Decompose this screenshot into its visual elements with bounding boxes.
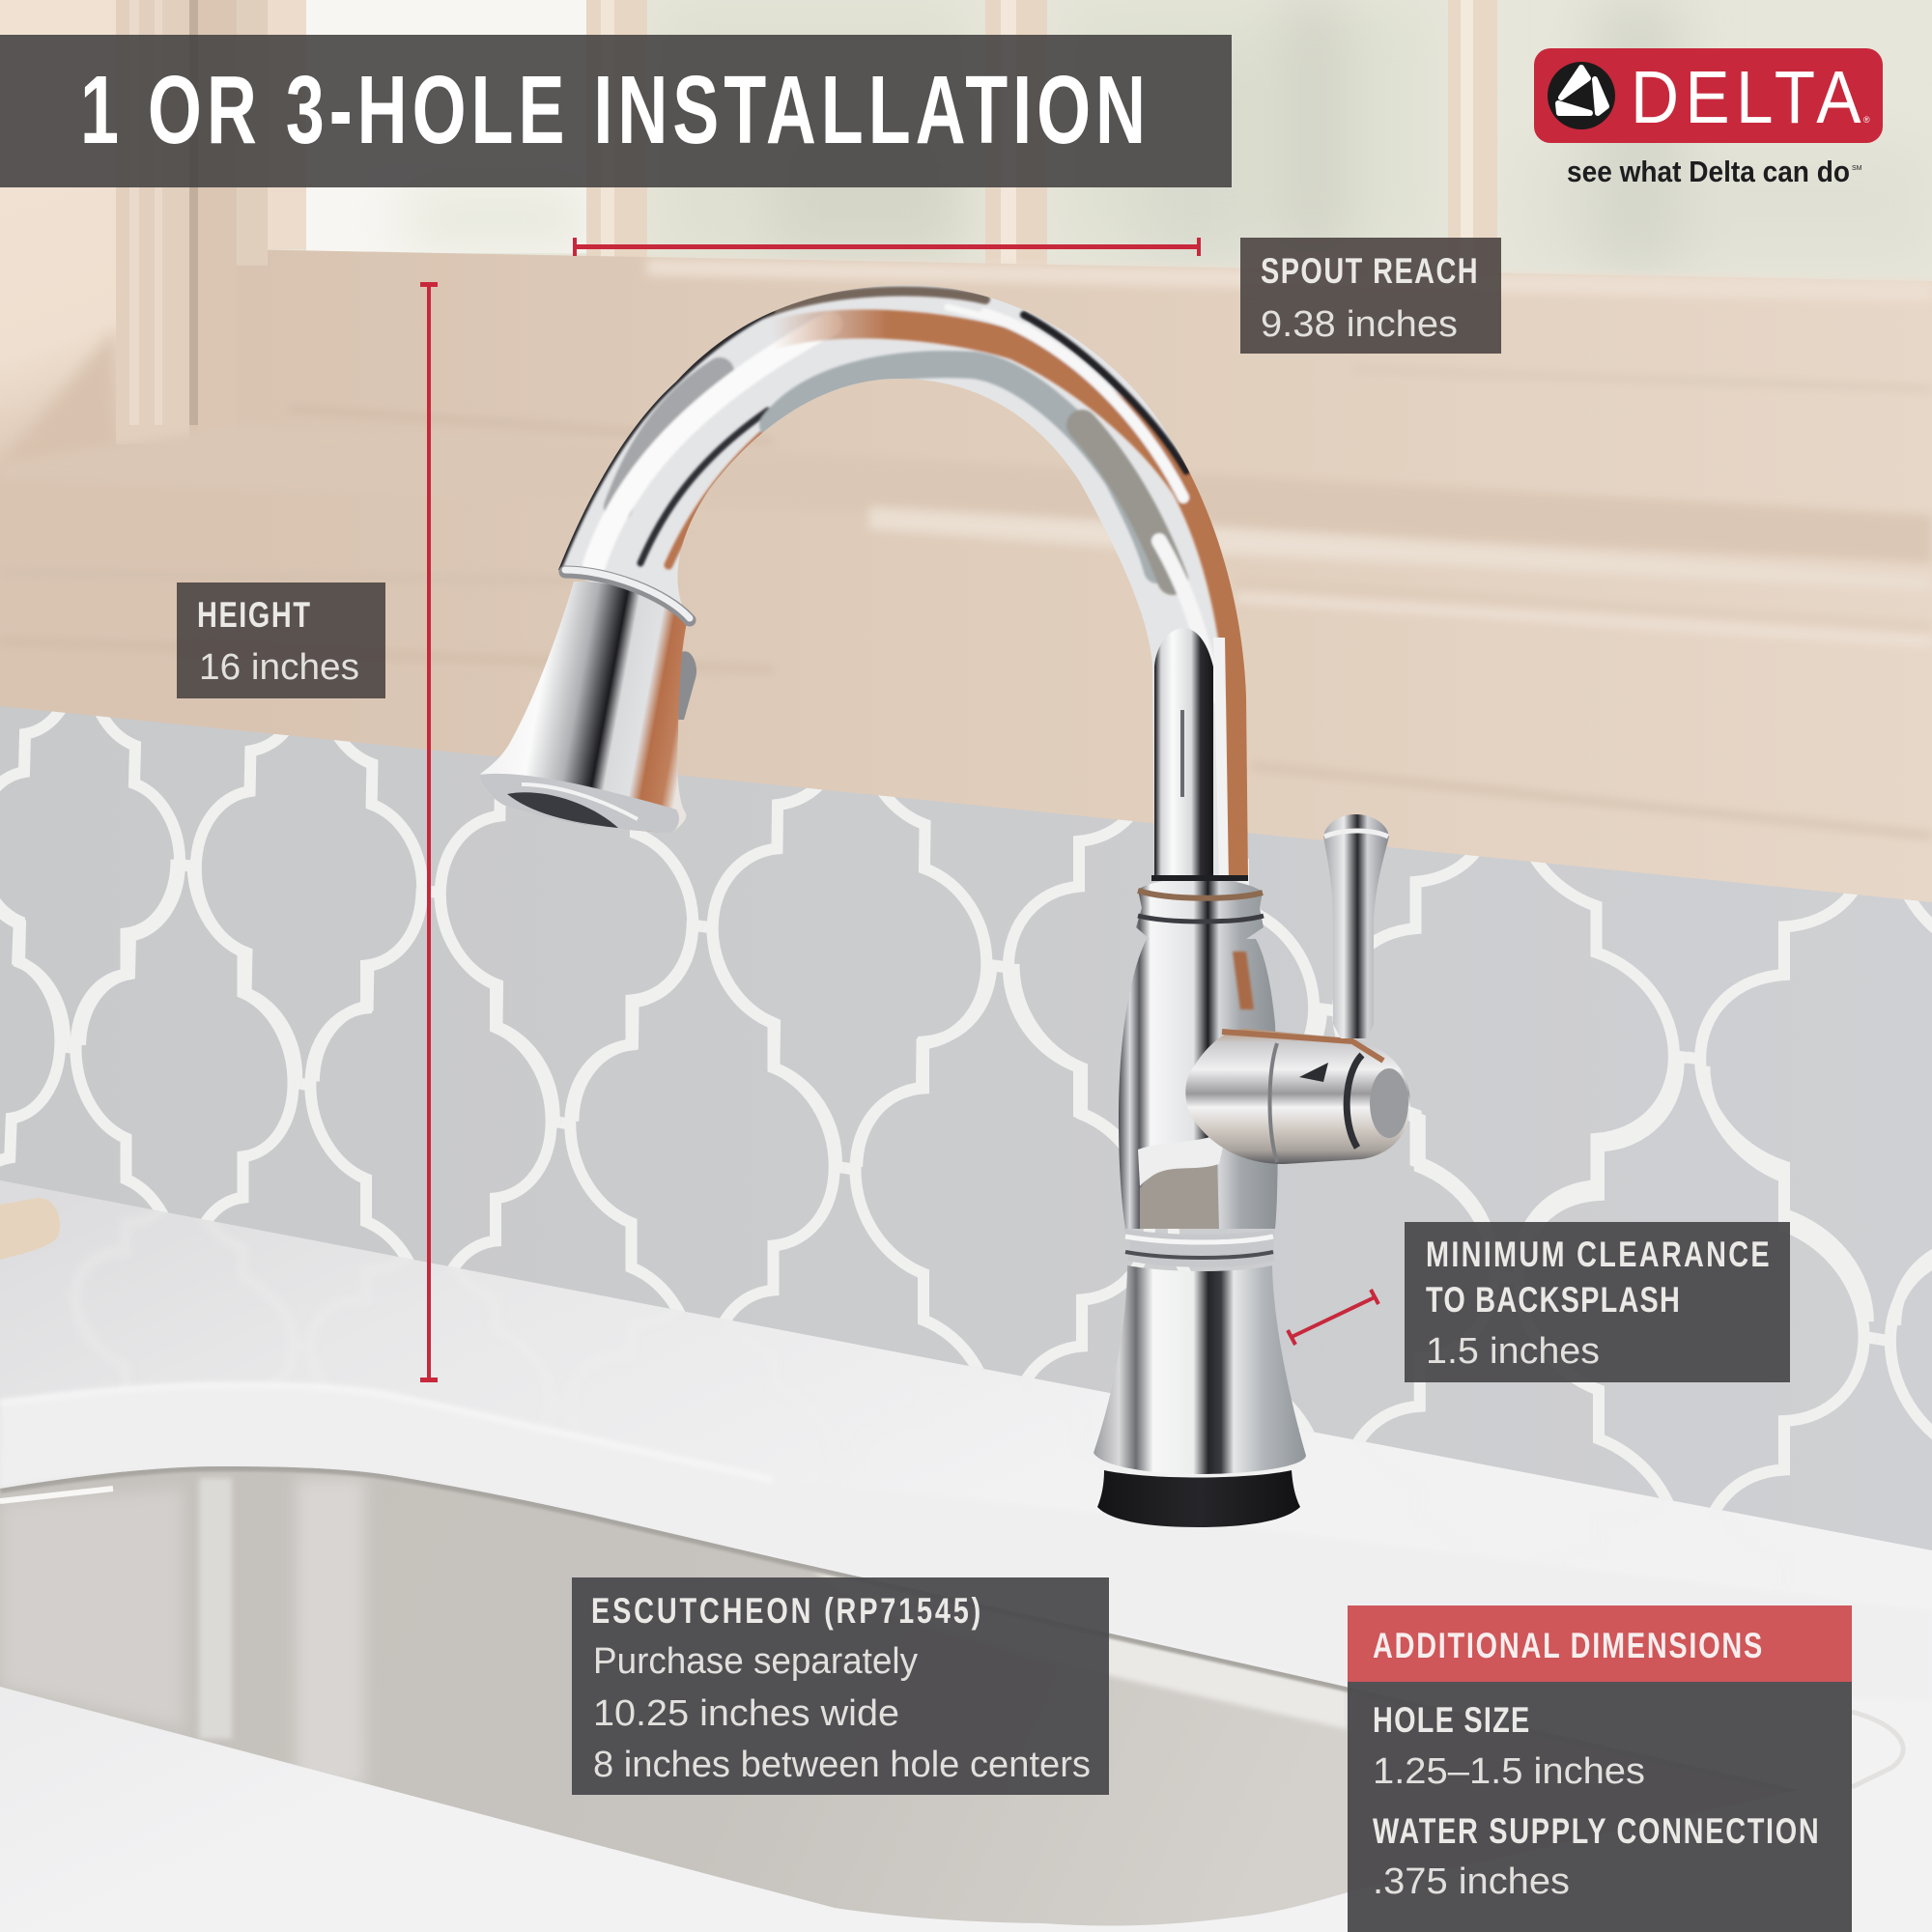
panel header [1348,1605,1852,1682]
Delta logo [1534,48,1883,188]
collar ring on head [565,570,690,620]
riser [1154,628,1213,884]
wordmark: DELTA [1631,56,1861,139]
callout: spout reach: 9.38 inches [1261,304,1458,345]
callout: escutcheon: ESCUTCHEON (RP71545) [591,1592,980,1632]
handle body [1185,1029,1410,1164]
background: window with blurred garden view [0,0,1932,290]
callout: height: HEIGHT [197,596,310,636]
wooden board at left [0,1198,60,1260]
sink far rim corner [1852,1712,1903,1787]
callout: minimum clearance: 1.5 inches [1426,1331,1600,1372]
countertop: white marble [0,1152,1932,1932]
neck collar [1136,875,1264,939]
callout: escutcheon: Purchase separately [593,1641,918,1682]
callout: height [177,582,385,698]
callout: minimum clearance [1405,1222,1790,1382]
undermount stainless sink [0,1466,1348,1926]
faint tile reflections [68,1152,1877,1852]
dimension line: spout reach [573,238,1201,256]
title text: 1 OR 3-HOLE INSTALLATION [80,56,1146,164]
black rubber base [1097,1470,1300,1527]
callout: minimum clearance: TO BACKSPLASH [1426,1281,1680,1321]
tagline: see what Delta can do [1567,155,1850,188]
registered mark: ® [1863,115,1870,125]
spray head [479,582,688,833]
dimension line: height [420,282,438,1382]
callout: spout reach: SPOUT REACH [1261,252,1478,292]
icon: delta triangle emblem [1548,62,1615,129]
faucet body [1119,939,1278,1229]
panel: additional dimensions: WATER SUPPLY CONNECTION [1373,1812,1819,1852]
panel: additional dimensions: .375 inches [1373,1861,1570,1902]
dimension line: minimum clearance [1288,1290,1378,1345]
lever handle [1323,814,1389,1038]
faucet [479,275,1410,1527]
title banner [0,35,1232,187]
moulding bands [0,259,1932,838]
wood window sill and moulding [0,0,1932,902]
panel header: ADDITIONAL DIMENSIONS [1373,1627,1762,1666]
callout: spout reach [1240,238,1501,354]
spout arc [551,275,1256,884]
pull-down spray trigger [676,651,696,720]
panel: additional dimensions: 1.25–1.5 inches [1373,1751,1645,1792]
panel: additional dimensions [1348,1605,1852,1932]
callout: escutcheon: 8 inches between hole centers [593,1745,1091,1785]
body band [1123,1229,1275,1267]
faucet base flare [1094,1265,1306,1474]
bullnose edge [0,1385,1932,1700]
callout: minimum clearance: MINIMUM CLEARANCE [1426,1236,1770,1275]
service mark: SM [1852,165,1862,172]
panel: additional dimensions: HOLE SIZE [1373,1701,1529,1741]
callout: escutcheon [572,1577,1109,1795]
callout: height: 16 inches [199,647,359,688]
mullions [586,0,1497,285]
callout: escutcheon: 10.25 inches wide [593,1693,899,1734]
backsplash: arabesque tiles [0,706,1932,1550]
